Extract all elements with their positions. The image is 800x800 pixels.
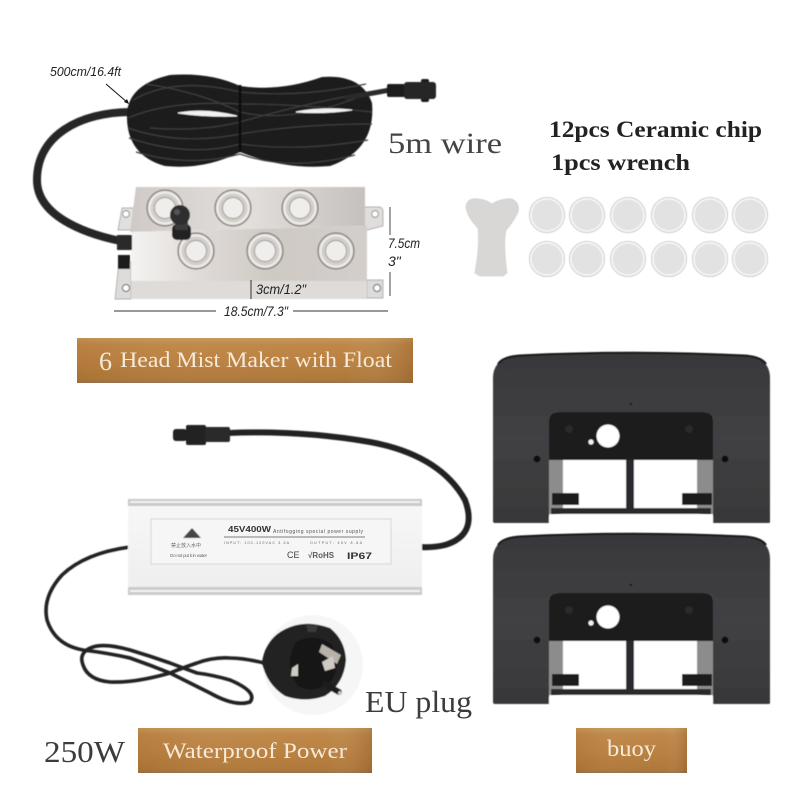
length annotation (50, 64, 129, 104)
banner: mist maker: 6 (99, 347, 112, 376)
banner: buoy: buoy (607, 736, 657, 761)
DC cable (228, 432, 469, 547)
panel: power supply (46, 425, 469, 703)
label: wattage: 250W (44, 734, 126, 769)
height annotation (388, 207, 420, 296)
label: ceramic chip count: 12pcs Ceramic chip (549, 117, 762, 142)
banner: mist maker: Head Mist Maker with Float (120, 347, 392, 372)
banner: waterproof power: Waterproof Power (163, 738, 348, 763)
length annotation: 500cm/16.4ft (50, 64, 122, 79)
cable from module to coil (37, 112, 132, 243)
power supply label text (170, 525, 372, 561)
power supply label text: IP67 (347, 551, 372, 561)
mains cable with loops (46, 547, 268, 703)
power supply label text: 45V400W (228, 525, 272, 534)
stainless mist module (115, 187, 383, 299)
panel: buoy bottom (493, 534, 770, 704)
banner: mist maker (77, 338, 413, 383)
ceramic chips (530, 198, 768, 276)
panel: mist maker with cable (37, 74, 436, 299)
wire coil (127, 74, 372, 167)
DC connector (173, 425, 230, 445)
power supply label text: INPUT: 100-120VAC 3.5A (224, 541, 290, 545)
power supply label text: Do not put it in water (170, 553, 207, 558)
power supply label text: √RoHS (308, 551, 335, 560)
label: 5m wire: 5m wire (388, 127, 502, 160)
float switch (170, 205, 191, 240)
wire end connector (345, 79, 436, 102)
banner: waterproof power (138, 728, 372, 773)
power supply label text: 禁止放入水中 (171, 542, 201, 549)
height annotation: 3" (388, 253, 402, 269)
banner: buoy (576, 728, 687, 773)
label: wrench count: 1pcs wrench (551, 150, 690, 175)
power supply casing (128, 499, 422, 595)
height annotation: 7.5cm (388, 235, 420, 251)
icon: wrench (466, 199, 518, 276)
panel: buoy top (493, 353, 770, 523)
power supply label text: Antifogging special power supply (273, 529, 364, 535)
width annotation: 18.5cm/7.3" (224, 303, 289, 319)
label: EU plug: EU plug (365, 684, 472, 719)
power supply label text: CE (287, 550, 300, 560)
power supply label text: OUTPUT: 45V 8.8A (310, 541, 363, 545)
depth annotation: 3cm/1.2" (256, 281, 307, 297)
icon: EU plug (262, 615, 363, 715)
